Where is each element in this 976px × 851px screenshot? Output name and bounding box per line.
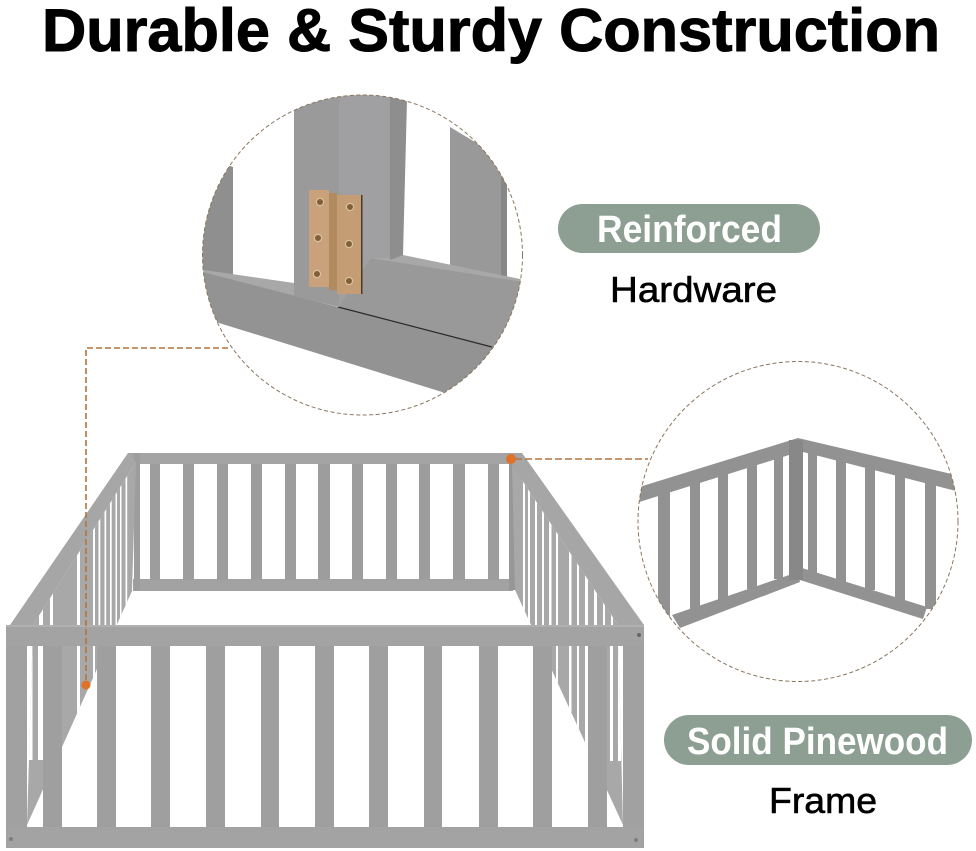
right upright (450, 127, 505, 290)
bed frame illustration (6, 453, 644, 848)
marker: corner point (506, 454, 516, 464)
text: frame: Frame (769, 780, 877, 821)
rail seam (338, 307, 492, 347)
rail top surface (203, 270, 294, 296)
pill: solid pinewood (664, 715, 972, 765)
label: solid pinewood frame (664, 715, 972, 821)
dashed circle outline (638, 362, 958, 682)
right lower rail (339, 258, 520, 347)
text: hardware: Hardware (610, 269, 777, 310)
pill text: solid pinewood: Solid Pinewood (687, 721, 948, 763)
right side panel (512, 453, 644, 835)
left side panel (10, 453, 136, 835)
callout: hinge leader (86, 348, 228, 685)
top right rail (798, 438, 960, 492)
front rails, posts and slats (6, 625, 644, 848)
bottom right rail (800, 568, 927, 619)
left upright (202, 166, 233, 279)
detail circle: pinewood corner (636, 362, 960, 682)
detail circle: hinge hardware (202, 94, 523, 416)
back rails and slats (128, 453, 522, 591)
left slats (658, 490, 670, 617)
callout: corner leader (515, 458, 648, 460)
top left rail (636, 438, 800, 503)
right post (339, 90, 390, 307)
pill text: reinforced: Reinforced (597, 209, 782, 251)
dashed circle outline (202, 95, 522, 415)
right slats (808, 453, 817, 574)
main lower rail (204, 272, 492, 392)
callout lines and markers (82, 348, 648, 690)
left post (294, 90, 339, 307)
marker: hinge point (82, 680, 90, 690)
corner post (789, 440, 803, 580)
icon: brass hinge (309, 190, 362, 294)
label: reinforced hardware (558, 204, 820, 310)
bottom left rail (672, 572, 800, 628)
pill: reinforced (558, 204, 820, 253)
